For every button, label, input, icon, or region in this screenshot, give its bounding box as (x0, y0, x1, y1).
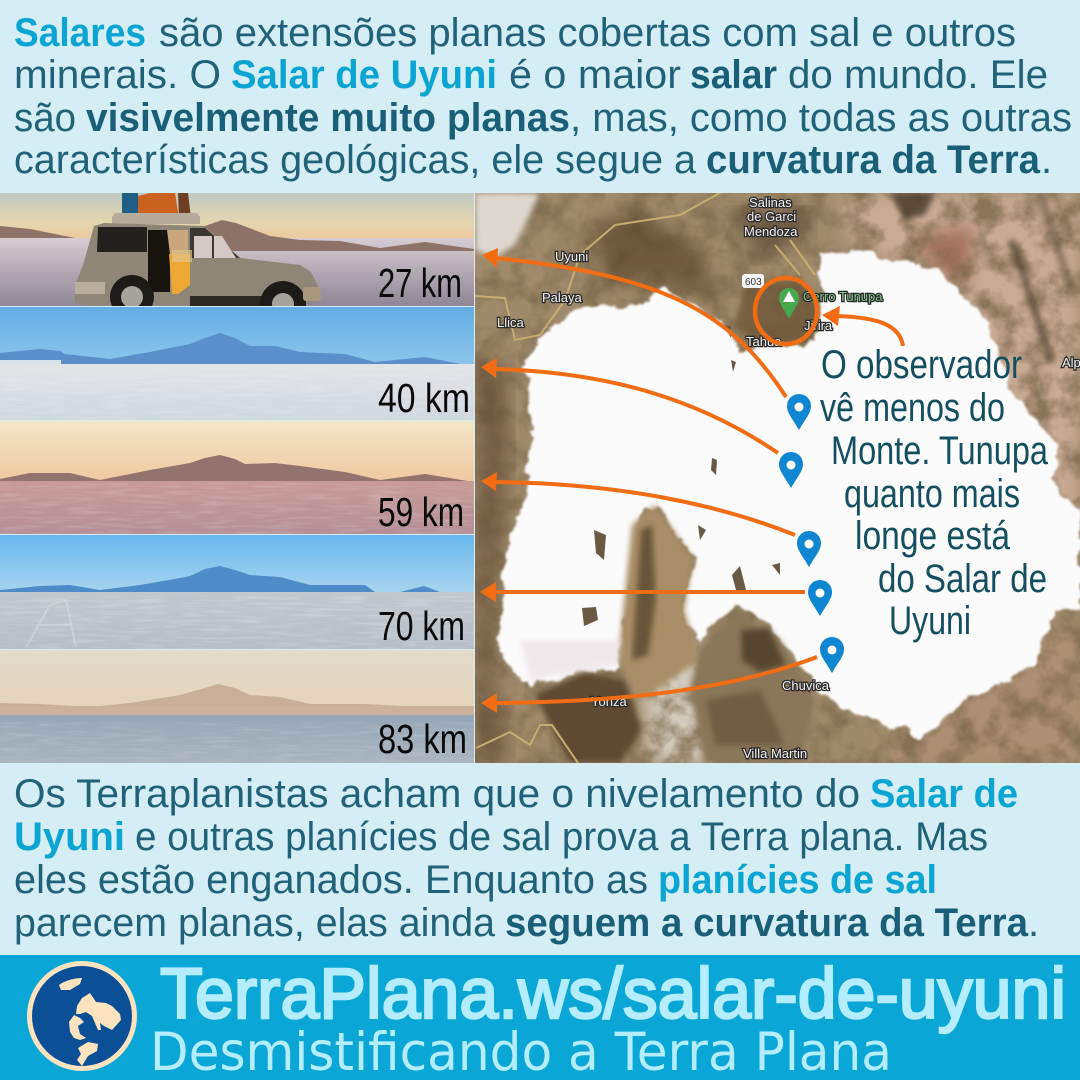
conclusion text: Os Terraplanistas acham que o nivelamento do (14, 772, 860, 816)
map labels: Uyuni (555, 249, 588, 264)
intro text (14, 11, 1072, 182)
footer band (0, 955, 1080, 1080)
map labels: Palaya (542, 290, 583, 305)
map labels: Llica (497, 315, 525, 330)
handwritten note: O observador (821, 343, 1022, 387)
conclusion text: . (1028, 901, 1039, 945)
arrow: 27 km (482, 248, 786, 397)
conclusion text: planícies de sal (658, 858, 937, 902)
map labels (497, 195, 1080, 761)
handwritten note (820, 343, 1049, 643)
pin 4 (808, 580, 832, 616)
intro text: minerais. O (14, 53, 221, 97)
conclusion text: seguem a curvatura da Terra (505, 901, 1029, 945)
conclusion text (14, 772, 1039, 945)
intro text: , mas, como todas as outras (570, 96, 1072, 140)
conclusion text: e outras planícies de sal prova a Terra plana. Mas (135, 815, 988, 859)
arrow: 40 km (481, 358, 778, 453)
arrow: 83 km (481, 657, 817, 713)
site URL: TerraPlana.ws/salar-de-uyuni (160, 955, 1066, 1034)
icon: flat earth globe (27, 961, 137, 1071)
conclusion text: parecem planas, elas ainda (14, 901, 496, 945)
arrow: 70 km (480, 582, 805, 602)
intro text: salar (690, 53, 777, 97)
intro text: são (14, 96, 76, 140)
route badge 603: 603 (745, 277, 762, 288)
route badge 603 (742, 274, 764, 288)
handwritten note: Uyuni (889, 599, 971, 643)
photo strip: 27 km (0, 193, 474, 306)
intro text: curvatura da Terra (706, 138, 1041, 182)
map labels: Yonza (591, 694, 627, 709)
map labels: Chuvica (782, 678, 830, 693)
map labels: Tahua (746, 334, 782, 349)
label: 27 km: 27 km (378, 260, 462, 306)
arrow: 59 km (481, 472, 795, 535)
pin 2 (779, 452, 803, 488)
pin 1 (787, 394, 811, 430)
intro text: Salares (14, 11, 146, 55)
car (75, 193, 321, 306)
handwritten note: longe está (855, 514, 1011, 558)
icon: mountain marker (779, 288, 799, 319)
intro text: são extensões planas cobertas com sal e outros (159, 11, 1016, 55)
salt flat (498, 250, 1080, 737)
map labels: de Garci (747, 209, 796, 224)
pin 5 (820, 637, 844, 673)
conclusion text: eles estão enganados. Enquanto as (14, 858, 648, 902)
map labels: Salinas (749, 195, 792, 210)
handwritten note: vê menos do (820, 386, 1005, 430)
pin 3 (797, 531, 821, 567)
road (475, 190, 815, 763)
map labels: Jirira (804, 318, 833, 333)
map labels: Cerro Tunupa (803, 289, 883, 304)
intro text: do mundo. Ele (788, 53, 1048, 97)
label: 70 km: 70 km (378, 603, 465, 649)
photo strip: 40 km (0, 307, 474, 421)
intro text: . (1041, 138, 1052, 182)
conclusion text: Uyuni (14, 815, 125, 859)
salt islets (582, 325, 780, 626)
intro text: Salar de Uyuni (231, 53, 497, 97)
label: 59 km: 59 km (378, 489, 464, 535)
photo strip: 70 km (0, 535, 474, 649)
label: 40 km: 40 km (378, 375, 470, 421)
label: 83 km: 83 km (378, 716, 467, 762)
photo strip: 83 km (0, 650, 474, 763)
photo strip: 59 km (0, 421, 474, 535)
handwritten note: do Salar de (878, 557, 1047, 601)
arrow: to observer text (822, 306, 903, 346)
intro text: é o maior (509, 53, 681, 97)
map labels: Mendoza (744, 224, 798, 239)
conclusion text: Salar de (870, 772, 1018, 816)
intro text: características geológicas, ele segue a (14, 138, 697, 182)
map labels: Villa Martin (743, 746, 807, 761)
orange circle around Cerro Tunupa (755, 278, 817, 344)
handwritten note: quanto mais (844, 472, 1020, 516)
intro text: visivelmente muito planas (86, 96, 570, 140)
satellite map (475, 190, 1080, 763)
